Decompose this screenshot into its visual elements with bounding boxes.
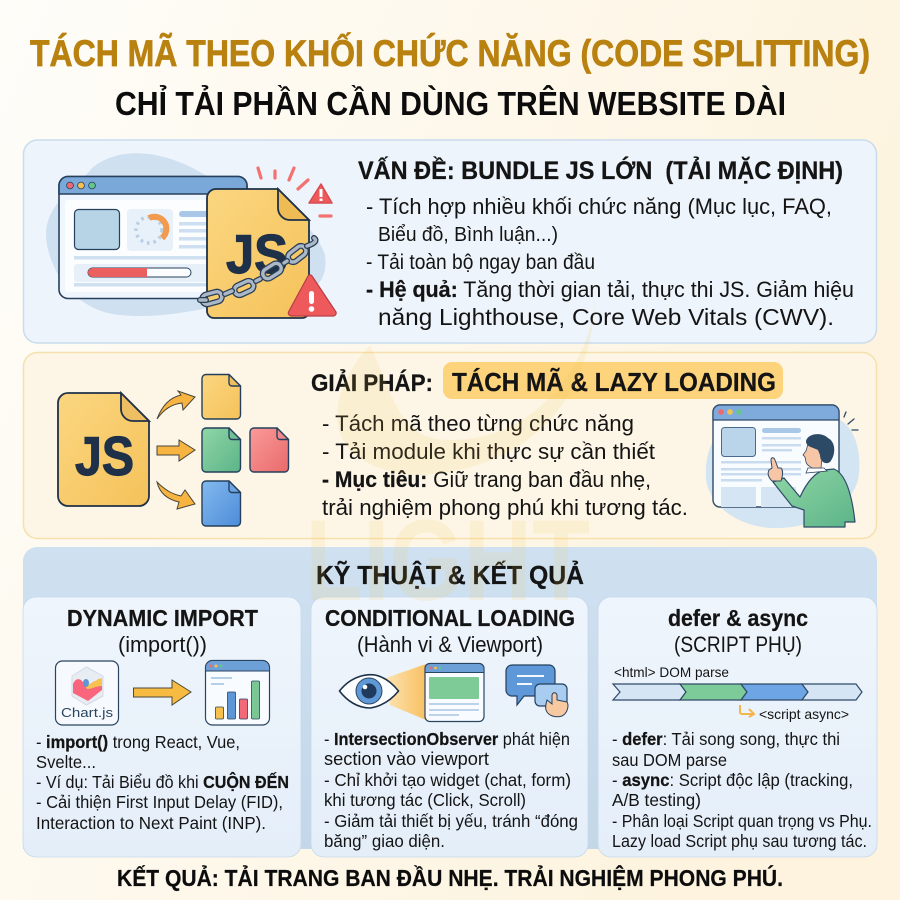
solution text block: trải nghiệm phong phú khi tương tác.	[322, 495, 688, 520]
problem heading: VẤN ĐỀ: BUNDLE JS LỚN (TẢI MẶC ĐỊNH)	[358, 155, 843, 185]
chart: script loading timeline: <script async>	[759, 706, 849, 722]
card text: section vào viewport	[324, 748, 489, 769]
arrow	[134, 680, 191, 705]
icon: JS file split into modules: JS	[75, 425, 134, 487]
watermark	[305, 300, 595, 625]
section heading: KỸ THUẬT & KẾT QUẢ	[316, 560, 584, 590]
card heading: (SCRIPT PHỤ)	[674, 632, 802, 657]
title	[30, 32, 870, 122]
panel: techniques and results	[23, 547, 877, 857]
card heading: (Hành vi & Viewport)	[357, 632, 543, 657]
icon: chat widget with hand	[506, 665, 568, 717]
card text: Svelte...	[36, 752, 96, 772]
card text: - Phân loại Script quan trọng vs Phụ.	[612, 811, 872, 831]
card text: - async: Script độc lập (tracking,	[612, 770, 853, 790]
card text	[612, 729, 872, 851]
card: defer and async	[598, 597, 877, 857]
problem text block: năng Lighthouse, Core Web Vitals (CWV).	[378, 304, 834, 330]
solution text block: - Tải module khi thực sự cần thiết	[322, 439, 656, 464]
card heading: DYNAMIC IMPORT	[67, 605, 258, 631]
card heading	[325, 605, 575, 657]
chart: script loading timeline: <html> DOM parse	[614, 664, 729, 680]
solution text block: - Tách mã theo từng chức năng	[322, 411, 634, 436]
icon: browser with locked JS bundle	[46, 153, 336, 318]
icon: Chart.js module: Chart.js	[61, 705, 114, 720]
chart: script loading timeline	[613, 664, 862, 722]
icon: Chart.js module	[56, 661, 118, 725]
icon: browser with locked JS bundle: JS	[226, 223, 288, 285]
card text: - Chỉ khởi tạo widget (chat, form)	[324, 770, 571, 790]
watermark: LIGHT	[305, 497, 590, 625]
solution heading: TÁCH MÃ & LAZY LOADING	[452, 367, 776, 397]
icon: bar chart in browser	[206, 660, 270, 725]
card heading: CONDITIONAL LOADING	[325, 605, 575, 631]
problem text block: Biểu đồ, Bình luận...)	[378, 223, 558, 246]
card text	[36, 732, 289, 833]
panel: solution	[24, 352, 876, 538]
problem text block	[366, 194, 854, 330]
card: dynamic import	[23, 597, 301, 857]
card: conditional loading	[311, 597, 588, 857]
card text: Lazy load Script phụ sau tương tác.	[612, 831, 867, 851]
card text: băng” giao diện.	[324, 831, 445, 851]
card text: Interaction to Next Paint (INP).	[36, 813, 266, 833]
card heading: (import())	[118, 632, 207, 657]
icon: eye watching viewport	[340, 664, 484, 722]
card text: - IntersectionObserver phát hiện	[324, 729, 570, 749]
card heading: defer & async	[668, 605, 808, 631]
solution heading	[311, 362, 783, 399]
card text: A/B testing)	[612, 790, 701, 810]
problem text block: - Hệ quả: Tăng thời gian tải, thực thi JS. Giảm hiệu	[366, 277, 854, 302]
card text: - Giảm tải thiết bị yếu, tránh “đóng	[324, 811, 578, 831]
problem text block: - Tích hợp nhiều khối chức năng (Mục lục, FAQ,	[366, 194, 832, 219]
card text: - import() trong React, Vue,	[36, 732, 240, 752]
card text: sau DOM parse	[612, 750, 727, 770]
solution heading: GIẢI PHÁP:	[311, 368, 433, 397]
card heading	[668, 605, 808, 657]
result line: KẾT QUẢ: TẢI TRANG BAN ĐẦU NHẸ. TRẢI NGHIỆM PHONG PHÚ.	[117, 863, 783, 891]
card heading	[67, 605, 258, 657]
solution text block: - Mục tiêu: Giữ trang ban đầu nhẹ,	[322, 467, 651, 492]
title: CHỈ TẢI PHẦN CẦN DÙNG TRÊN WEBSITE DÀI	[115, 85, 786, 122]
card text: - Cải thiện First Input Delay (FID),	[36, 792, 283, 812]
icon: chain	[200, 238, 316, 305]
card text: - defer: Tải song song, thực thi	[612, 729, 840, 749]
solution text block	[322, 411, 688, 520]
card text	[324, 729, 578, 851]
panel: problem	[24, 140, 876, 343]
problem text block: - Tải toàn bộ ngay ban đầu	[366, 251, 595, 274]
card text: khi tương tác (Click, Scroll)	[324, 790, 526, 810]
card text: - Ví dụ: Tải Biểu đồ khi CUỘN ĐẾN	[36, 771, 289, 792]
icon: JS file split into modules	[58, 374, 288, 526]
icon: person pointing at browser	[706, 405, 859, 528]
